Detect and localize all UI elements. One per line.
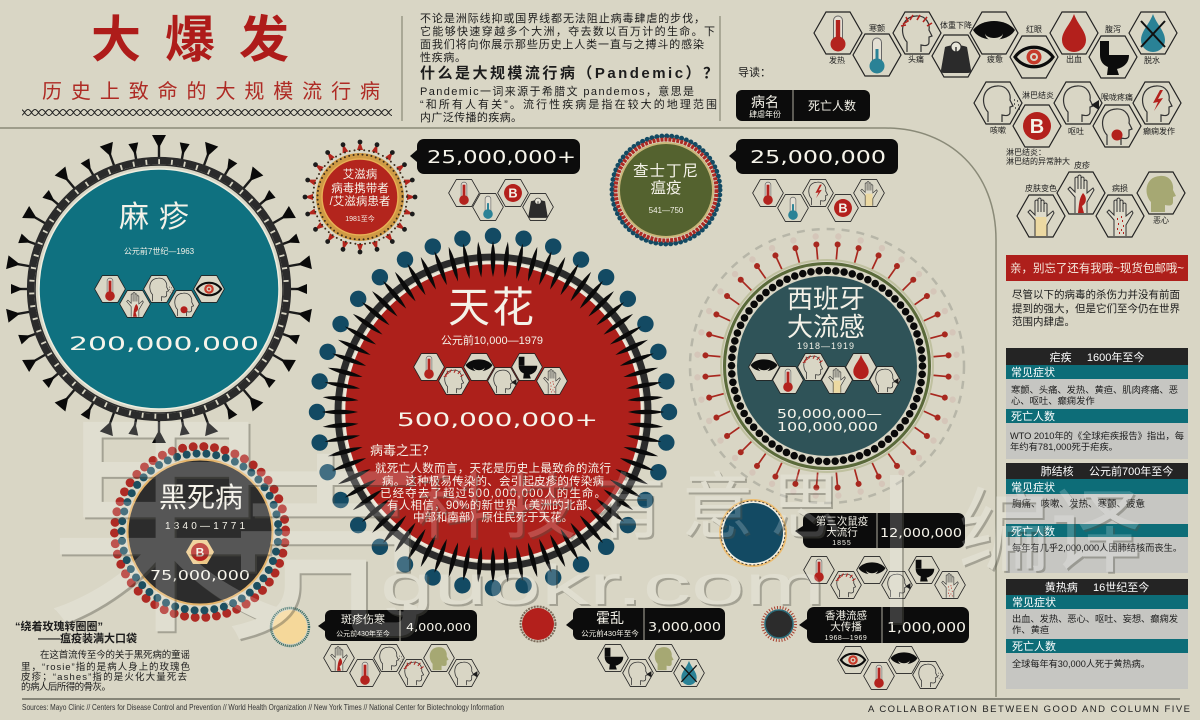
typhus callout: 斑疹伤寒 [341, 612, 385, 626]
Justinian years: 541—750 [649, 206, 684, 215]
icon: vomiting [1054, 82, 1102, 124]
Black Death deaths: 75,000,000 [150, 569, 250, 584]
symptom key: top row [814, 12, 1177, 78]
malaria deaths [1010, 430, 1184, 452]
Black Death symptom [186, 540, 214, 564]
icon: swollen lymph nodes [1013, 105, 1061, 147]
TB deaths: 每年有几乎2,000,000人因肺结核而丧生。 [1012, 542, 1182, 553]
pandemic definition: Pandemic一词来源于希腊文 pandemos，意思是 [420, 84, 694, 98]
TB heading: 肺结核 公元前700年至今 [1041, 464, 1173, 478]
third plague callout: 1855 [832, 540, 852, 547]
sources: Sources: Mayo Clinic // Centers for Disease Control and Prevention // World Health Organization // New York Times // National Center for Biotechnology Information [22, 703, 504, 712]
smallpox paragraph: 已经夺去了超过500,000,000人的生命。 [380, 486, 606, 500]
symptom key: middle row [974, 82, 1181, 166]
typhus callout: 4,000,000 [406, 621, 471, 634]
symptom labels: top row: 脱水 [1144, 55, 1160, 65]
symptom labels: lower row: 病损 [1112, 183, 1128, 193]
malaria deaths: 年约有781,000死于疟疾。 [1010, 441, 1118, 452]
AIDS name: 艾滋病 [343, 167, 378, 181]
Justinian death callout [729, 139, 898, 174]
icon: chills [853, 34, 901, 76]
panel: tuberculosis: 常见症状 [1011, 480, 1055, 494]
typhus circle [271, 608, 309, 646]
smallpox paragraph [375, 461, 611, 524]
malaria symptoms [1011, 384, 1178, 406]
symptom labels: lower row: 恶心 [1153, 216, 1169, 225]
Black Death years: 1340—1771 [165, 521, 245, 532]
legend box: 肆虐年份 [749, 109, 781, 119]
legend box [736, 90, 870, 121]
intro text: 性疾病。 [420, 50, 466, 64]
icon: nausea [1137, 172, 1185, 214]
smallpox paragraph: 有人相信，90%的新世界（美洲的北部、 [387, 498, 599, 512]
panel: tuberculosis [1006, 463, 1188, 573]
intro paragraph: 尽管以下的病毒的杀伤力并没有前面 [1012, 288, 1180, 301]
icon: headache [893, 12, 941, 54]
symptom labels: top row [829, 20, 1160, 65]
smallpox symptoms [414, 354, 567, 394]
yellow fever deaths: 全球每年有30,000人死于黄热病。 [1012, 658, 1150, 669]
yellow fever heading: 黄热病 16世纪至今 [1045, 580, 1149, 594]
AIDS name: /艾滋病患者 [330, 194, 390, 208]
watermark: guokr.com [380, 553, 825, 616]
pandemic definition: “和所有人有关”。流行性疾病是指在较大的地理范围 [420, 97, 717, 111]
Justinian name [633, 162, 699, 197]
Spanish flu name: 大流感 [787, 312, 865, 342]
smallpox name: 天花 [448, 284, 536, 331]
symptom labels: middle row: 咳嗽 [990, 125, 1006, 135]
Justinian death callout: 25,000,000 [750, 147, 886, 168]
intro paragraph: 范围内肆虐。 [1012, 315, 1075, 328]
Hong Kong flu symptoms [838, 647, 943, 689]
AIDS virus [303, 140, 417, 254]
Spanish flu deaths: 100,000,000 [777, 420, 878, 434]
reading guide label: 导读： [738, 65, 771, 79]
cholera circle [520, 606, 556, 642]
symptom labels: top row: 体重下降 [940, 20, 972, 30]
symptom labels: top row: 红眼 [1026, 24, 1042, 34]
cholera symptoms [598, 645, 704, 686]
Spanish flu name [787, 284, 865, 342]
third plague symptoms [804, 557, 965, 598]
chain divider under title [22, 108, 392, 117]
watermark: 编译 [958, 458, 1142, 591]
typhus symptoms [324, 645, 479, 686]
Ring-a-roses paragraph: 在这首流传至今的关于黑死病的童谣 [40, 649, 190, 661]
symptom labels: middle row: 呕吐 [1068, 127, 1084, 136]
Justinian name: 瘟疫 [650, 179, 682, 197]
AIDS name: 病毒携带者 [331, 181, 389, 195]
Justinian plague [612, 136, 720, 244]
Spanish flu years: 1918—1919 [797, 341, 855, 351]
lymph note: 淋巴结的异常肿大 [1006, 156, 1070, 166]
malaria symptoms: 心、呕吐、癫痫发作 [1011, 395, 1095, 406]
Hong Kong flu callout [799, 607, 969, 643]
Ring-a-roses paragraph: 里，“rosie”指的是病人身上的玫瑰色 [21, 661, 190, 673]
icon: red eye [1010, 36, 1058, 78]
AIDS years: 1981至今 [345, 214, 375, 223]
panel: malaria: 死亡人数 [1011, 409, 1055, 423]
TB symptoms: 胸痛、咳嗽、发热、寒颤、疲惫 [1012, 498, 1146, 510]
malaria deaths: WTO 2010年的《全球疟疾报告》指出，每 [1010, 430, 1184, 441]
symptom labels: lower row [1025, 160, 1169, 225]
measles deaths: 200,000,000 [69, 333, 259, 355]
icon: fatigue [970, 12, 1018, 54]
legend box: 病名 [751, 94, 779, 110]
Ring-a-roses paragraph [21, 649, 190, 693]
Spanish flu virus [690, 229, 964, 503]
AIDS name [330, 167, 390, 208]
Justinian symptoms [753, 180, 884, 221]
watermark: 科技有意思 [416, 448, 842, 553]
symptom labels: lower row: 皮疹 [1074, 160, 1090, 170]
Hong Kong flu callout: 大传播 [830, 620, 862, 633]
Spanish flu deaths: 50,000,000— [777, 407, 882, 421]
icon: fever [814, 12, 862, 54]
Ring-a-roses paragraph: 皮疹；“ashes”指的是火化大量死去 [21, 671, 187, 683]
symptom labels: top row: 疲惫 [987, 54, 1003, 64]
title: 大爆发 [91, 0, 313, 72]
malaria heading: 疟疾 1600年至今 [1050, 350, 1144, 364]
measles years: 公元前7世纪—1963 [124, 246, 195, 256]
icon: diarrhea [1089, 36, 1137, 78]
third plague callout [795, 513, 965, 548]
icon: skin discolouration [1017, 195, 1065, 237]
symptom labels: top row: 头痛 [908, 54, 924, 64]
symptom labels: lower row: 皮肤变色 [1025, 183, 1057, 193]
smallpox deaths: 500,000,000+ [397, 409, 598, 431]
legend box: 死亡人数 [808, 98, 856, 113]
symptom labels: top row: 腹泻 [1105, 24, 1121, 34]
icon: sore throat [1093, 105, 1141, 147]
symptom labels: middle row: 癫痫发作 [1143, 126, 1175, 136]
symptom labels: middle row [990, 90, 1175, 136]
smallpox sidebar heading: 病毒之王？ [370, 443, 435, 458]
Black Death virus [114, 446, 286, 618]
intro paragraph: 提到的强大，但是它们至今仍在世界 [1012, 302, 1180, 315]
red banner [1006, 255, 1188, 281]
Spanish flu name: 西班牙 [787, 284, 865, 314]
panel: malaria: 常见症状 [1011, 365, 1055, 379]
cholera callout: 霍乱 [596, 610, 624, 626]
Ring-a-roses heading: ——瘟疫装满大口袋 [38, 631, 137, 645]
smallpox paragraph: 病。这种极易传染的、会引起皮疹的传染病 [382, 474, 604, 488]
cholera callout: 3,000,000 [648, 620, 721, 634]
icon: cough [974, 82, 1022, 124]
icon: rash [1057, 172, 1105, 214]
typhus callout: 公元前430年至今 [336, 629, 390, 638]
Hong Kong flu callout: 香港流感 [825, 609, 867, 622]
lymph note [1006, 147, 1070, 166]
red banner: 亲，别忘了还有我哦~现货包邮哦~ [1010, 261, 1184, 275]
subtitle: 历史上致命的大规模流行病 [42, 80, 380, 103]
intro text [420, 11, 715, 64]
pandemic definition: 内广泛传播的疾病。 [420, 110, 522, 124]
third plague callout: 12,000,000 [880, 526, 962, 540]
AIDS death callout: 25,000,000+ [427, 147, 576, 168]
Hong Kong flu callout: 1,000,000 [887, 621, 966, 636]
panel: malaria [1006, 348, 1188, 459]
smallpox virus [309, 228, 677, 596]
symptom labels: middle row: 喉咙疼痛 [1101, 92, 1133, 102]
Justinian name: 查士丁尼 [633, 162, 699, 180]
watermark [45, 335, 1142, 682]
Black Death name: 黑死病 [159, 482, 243, 513]
watermark: 壳 [225, 390, 425, 680]
cholera callout: 公元前430年至今 [581, 628, 639, 638]
Ring-a-roses paragraph: 的病人后所得的骨灰。 [21, 681, 111, 693]
icon: weight loss [932, 35, 980, 77]
panel: yellow fever: 常见症状 [1012, 595, 1056, 609]
heading: what is a pandemic: 什么是大规模流行病（Pandemic）？ [420, 64, 718, 82]
panel: other diseases intro [1006, 255, 1188, 328]
third plague callout: 第三次鼠疫 [816, 514, 869, 528]
Black Death symptom: B [196, 546, 205, 560]
lymph note: 淋巴结炎： [1006, 147, 1046, 157]
pandemic definition [420, 84, 717, 124]
yellow fever symptoms: 作、黄疸 [1012, 624, 1049, 635]
panel: yellow fever [1006, 579, 1188, 689]
icon: seizure [1133, 82, 1181, 124]
symptom labels: middle row: 淋巴结炎 [1022, 90, 1054, 100]
intro text: 面我们将向你展示那些历史上人类一直与之搏斗的感染 [420, 37, 704, 51]
cholera callout [566, 608, 725, 640]
Ring-a-roses heading [15, 619, 137, 645]
smallpox paragraph: 就死亡人数而言，天花是历史上最致命的流行 [375, 461, 611, 475]
Spanish flu symptoms [749, 354, 900, 393]
panel: yellow fever: 死亡人数 [1012, 639, 1056, 653]
watermark: 果 [45, 335, 285, 682]
measles virus [0, 125, 329, 453]
smallpox years: 公元前10,000—1979 [441, 333, 543, 347]
Ring-a-roses heading: “绕着玫瑰转圈圈” [15, 619, 103, 633]
Spanish flu deaths [777, 407, 882, 434]
malaria symptoms: 寒颤、头痛、发热、黄疸、肌肉疼痛、恶 [1011, 384, 1178, 395]
symptom key: lower row [1017, 160, 1185, 237]
AIDS symptoms [449, 180, 553, 220]
intro text: 不论是洲际线抑或国界线都无法阻止病毒肆虐的步伐， [420, 11, 705, 25]
measles symptoms [95, 276, 224, 317]
intro text: 它能够快速穿越多个大洲，夺去数以百万计的生命。下 [420, 24, 715, 38]
Hong Kong flu callout: 1968—1969 [825, 635, 867, 642]
icon: lesions [1096, 195, 1144, 237]
AIDS death callout [410, 139, 580, 174]
third plague circle [719, 499, 787, 567]
intro paragraph [1012, 288, 1180, 328]
panel: tuberculosis: 死亡人数 [1011, 524, 1055, 538]
icon: bleeding [1050, 12, 1098, 54]
measles name: 麻疹 [119, 201, 199, 234]
smallpox paragraph: 中部和南部）原住民死于天花。 [413, 510, 573, 524]
collaboration credit: A COLLABORATION BETWEEN GOOD AND COLUMN FIVE [868, 704, 1190, 715]
symptom labels: top row: 寒颤 [869, 23, 885, 33]
yellow fever symptoms: 出血、发热、恶心、呕吐、妄想、癫痫发 [1012, 613, 1178, 624]
typhus callout [318, 610, 477, 641]
symptom labels: top row: 出血 [1066, 54, 1082, 64]
Hong Kong flu circle [762, 608, 796, 640]
icon: dehydration [1129, 12, 1177, 54]
yellow fever symptoms [1012, 613, 1178, 635]
third plague callout: 大流行 [826, 526, 858, 538]
symptom labels: top row: 发热 [829, 55, 845, 65]
